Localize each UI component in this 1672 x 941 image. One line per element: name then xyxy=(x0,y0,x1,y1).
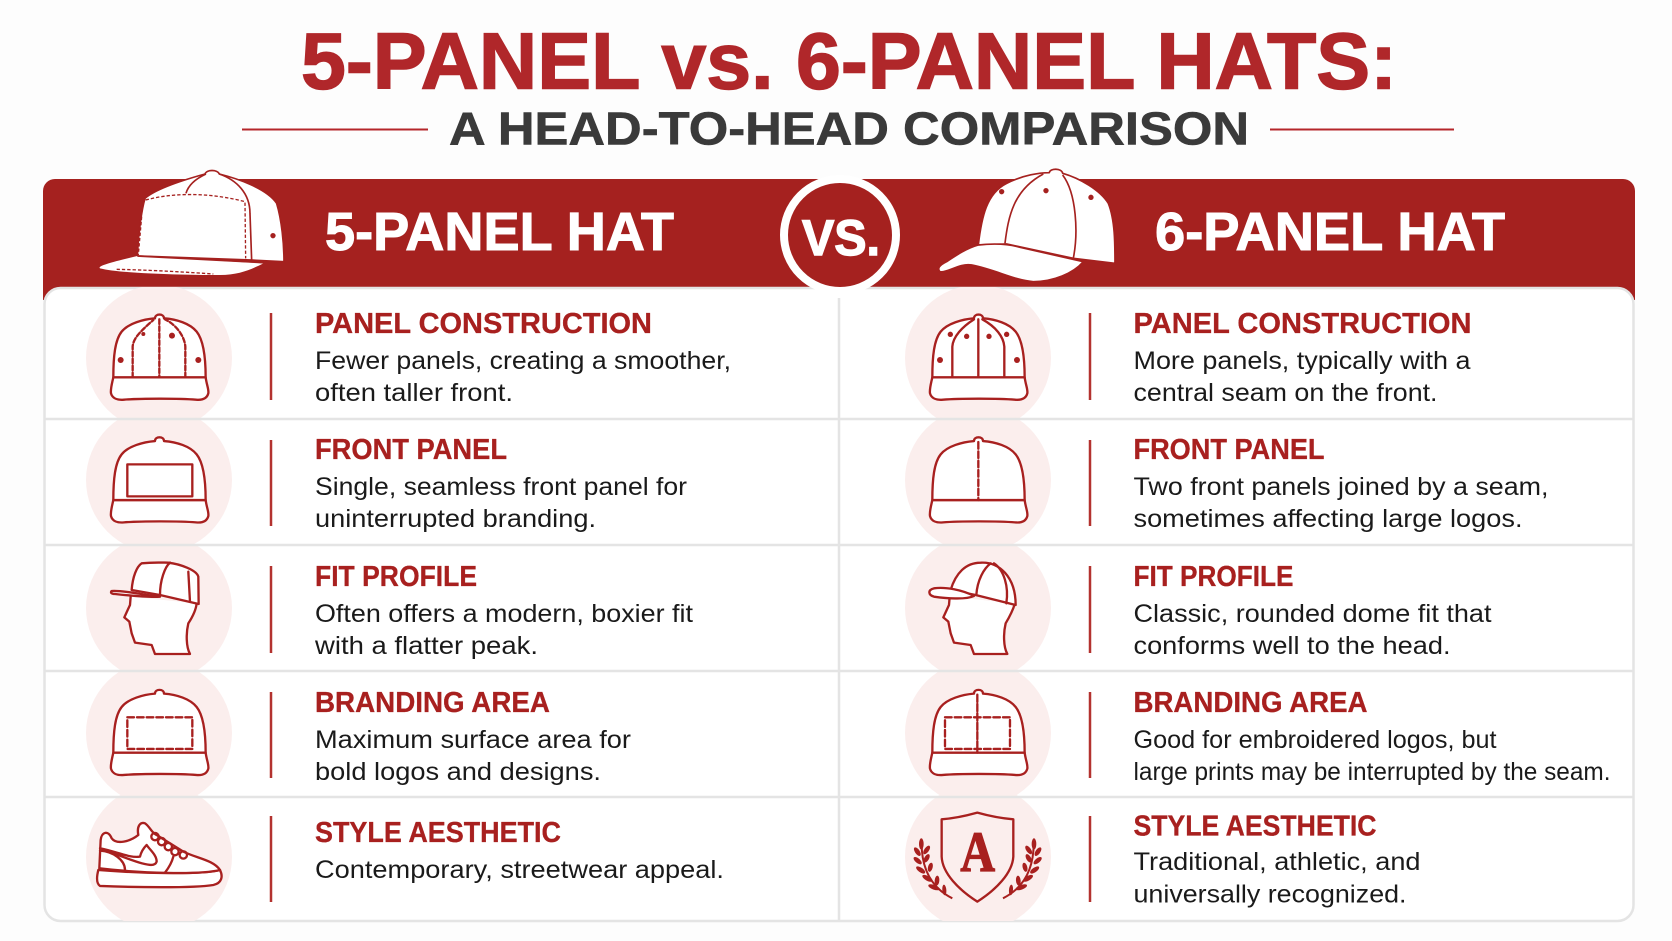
5-panel: branding area xyxy=(315,687,631,786)
header: 6-panel hat: 6-PANEL HAT xyxy=(1155,202,1505,262)
icon: 6-panel branding area xyxy=(930,690,1027,775)
5-panel: fit profile xyxy=(314,561,693,660)
vs badge xyxy=(784,179,896,291)
5-panel: front panel: Single, seamless front panel for xyxy=(315,473,687,501)
icon: 6-panel construction xyxy=(930,315,1027,400)
6-panel: panel construction: More panels, typically with a xyxy=(1134,347,1471,375)
icon: 5-panel hat xyxy=(100,170,284,275)
5-panel: front panel: uninterrupted branding. xyxy=(315,505,596,533)
vertical separators xyxy=(271,313,1090,902)
6-panel: front panel: FRONT PANEL xyxy=(1134,434,1324,466)
6-panel: style aesthetic: Traditional, athletic, and xyxy=(1134,848,1420,876)
5-panel: fit profile: with a flatter peak. xyxy=(314,632,538,660)
6-panel: front panel: sometimes affecting large logos. xyxy=(1134,505,1522,533)
5-panel: panel construction xyxy=(315,308,731,407)
5-panel: front panel xyxy=(315,434,687,533)
icon: 5-panel branding area xyxy=(111,690,208,775)
5-panel: fit profile: FIT PROFILE xyxy=(315,561,477,593)
header band xyxy=(43,179,1635,300)
icon: 5-panel front xyxy=(111,437,208,522)
icon backgrounds xyxy=(86,285,1051,930)
6-panel: branding area xyxy=(1134,687,1610,786)
6-panel: branding area: large prints may be interrupted by the seam. xyxy=(1134,758,1610,786)
5-panel: front panel: FRONT PANEL xyxy=(315,434,507,466)
icon: sneaker xyxy=(97,823,222,887)
icon: 5-panel fit profile xyxy=(111,562,199,654)
6-panel: style aesthetic: universally recognized. xyxy=(1134,880,1406,908)
5-panel: style aesthetic xyxy=(315,817,724,884)
5-panel: style aesthetic: STYLE AESTHETIC xyxy=(315,817,561,849)
icon: varsity shield with laurels xyxy=(912,813,1043,902)
6-panel: panel construction: PANEL CONSTRUCTION xyxy=(1134,308,1472,340)
title: 5-PANEL vs. 6-PANEL HATS: xyxy=(301,16,1397,106)
6-panel: fit profile: conforms well to the head. xyxy=(1134,632,1450,660)
6-panel: front panel: Two front panels joined by a seam, xyxy=(1134,473,1548,501)
5-panel: panel construction: Fewer panels, creating a smoother, xyxy=(315,347,731,375)
6-panel: branding area: Good for embroidered logos, but xyxy=(1134,726,1497,754)
5-panel: panel construction: PANEL CONSTRUCTION xyxy=(315,308,652,340)
icon: 6-panel hat xyxy=(939,169,1115,282)
6-panel: branding area: BRANDING AREA xyxy=(1134,687,1368,719)
subtitle with rules: A HEAD-TO-HEAD COMPARISON xyxy=(449,102,1249,154)
icon: 6-panel fit profile xyxy=(929,563,1016,654)
6-panel: panel construction xyxy=(1134,308,1472,407)
comparison panel xyxy=(44,288,1634,921)
icon: 5-panel construction xyxy=(111,315,208,400)
5-panel: panel construction: often taller front. xyxy=(315,379,513,407)
5-panel: style aesthetic: Contemporary, streetwear appeal. xyxy=(315,856,724,884)
5-panel: branding area: BRANDING AREA xyxy=(315,687,550,719)
5-panel: branding area: bold logos and designs. xyxy=(315,758,601,786)
5-panel: fit profile: Often offers a modern, boxier fit xyxy=(315,600,693,628)
icon: 6-panel front xyxy=(930,437,1027,522)
5-panel: branding area: Maximum surface area for xyxy=(315,726,631,754)
6-panel: front panel xyxy=(1134,434,1548,533)
vs badge: VS. xyxy=(802,210,880,266)
6-panel: style aesthetic: STYLE AESTHETIC xyxy=(1134,810,1377,842)
row and column dividers xyxy=(45,298,1633,920)
icon: varsity shield with laurels: A xyxy=(960,821,995,884)
6-panel: fit profile xyxy=(1134,561,1492,660)
6-panel: fit profile: FIT PROFILE xyxy=(1134,561,1294,593)
6-panel: fit profile: Classic, rounded dome fit that xyxy=(1134,600,1492,628)
6-panel: panel construction: central seam on the front. xyxy=(1134,379,1438,407)
6-panel: style aesthetic xyxy=(1134,810,1420,908)
header: 5-panel hat: 5-PANEL HAT xyxy=(325,202,674,262)
